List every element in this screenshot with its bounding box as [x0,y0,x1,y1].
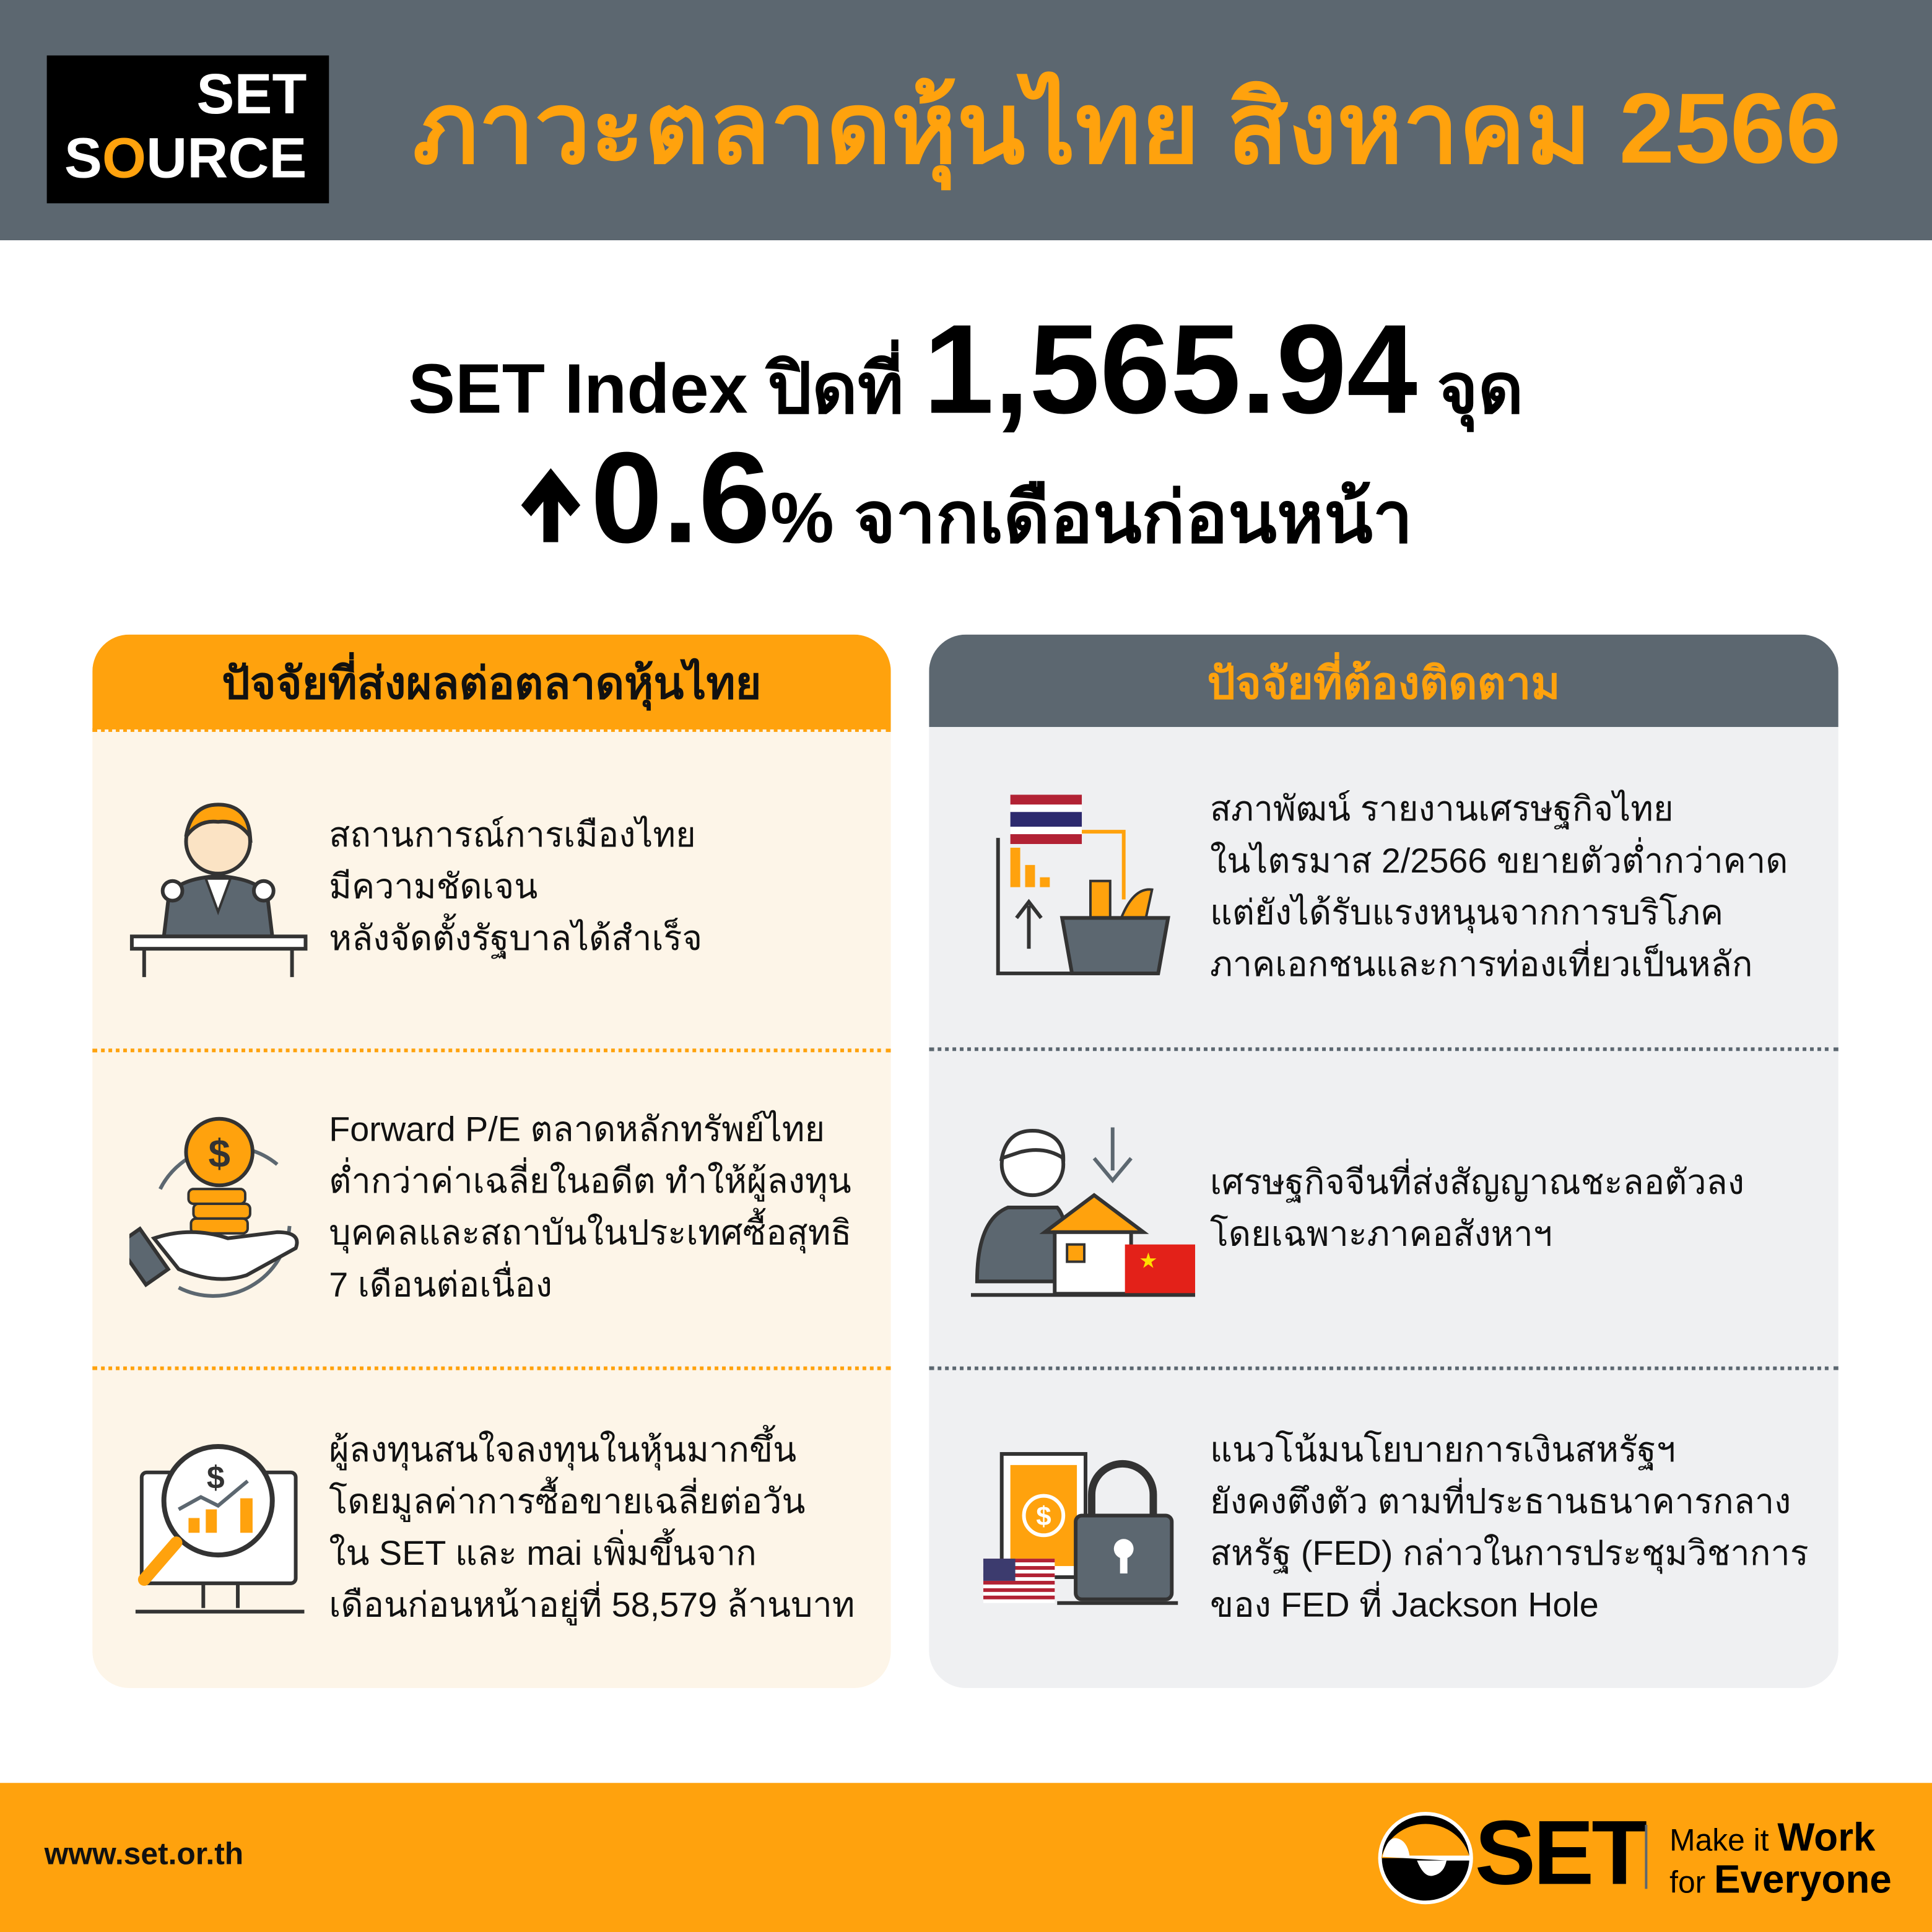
text: politics [329,816,702,959]
SET logo and slogan: SET [1475,1801,1645,1904]
icon: magnifier over monitor: $ [207,1460,225,1495]
icon: up arrow [521,468,581,542]
icon: worried man with house and China flag [971,1127,1195,1297]
text: Thai GDP: ในไตรมาส 2/2566 ขยายตัวต่ำกว่าคาด [1210,842,1788,880]
text: politics: สถานการณ์การเมืองไทย [329,816,696,854]
icon: hand with coin [129,1117,299,1298]
logo: SET SOURCE: SET [196,61,307,126]
text: trading value: เดือนก่อนหน้าอยู่ที่ 58,579 ล้านบาท [329,1586,855,1624]
panel: right factors to watch [929,635,1838,1688]
text: Thai GDP: สภาพัฒน์ รายงานเศรษฐกิจไทย [1210,790,1674,828]
text: Thai GDP: ภาคเอกชนและการท่องเที่ยวเป็นหลัก [1210,945,1753,983]
text: trading value [329,1425,855,1625]
text: forward PE [329,1110,851,1303]
text: forward PE: บุคคลและสถาบันในประเทศซื้อสุทธิ [329,1214,851,1252]
icon: worried man with house and China flag: ★ [1140,1251,1157,1271]
panel: left factors [92,635,891,1688]
text: trading value: โดยมูลค่าการซื้อขายเฉลี่ยต่อวัน [329,1482,805,1520]
text: FED policy: ของ FED ที่ Jackson Hole [1210,1586,1599,1624]
left panel heading [92,635,891,729]
icon: money and padlock with US flag [983,1451,1178,1605]
icon: hand with coin: $ [208,1131,230,1175]
text: trading value: ใน SET และ mai เพิ่มขึ้นจาก [329,1534,757,1572]
text: politics: มีความชัดเจน [329,868,537,906]
website url: www.set.or.th [45,1837,243,1872]
text: FED policy: ยังคงตึงตัว ตามที่ประธานธนาคารกลาง [1210,1482,1791,1520]
SET logo and slogan [1378,1801,1892,1905]
text: forward PE: 7 เดือนต่อเนื่อง [329,1266,552,1303]
right panel heading: ปัจจัยที่ต้องติดตาม [1207,658,1560,708]
text: Thai GDP [1210,790,1788,983]
text: FED policy [1210,1430,1809,1624]
icon: politician at podium [130,803,307,977]
logo: SET SOURCE: SOURCE [64,126,307,189]
text: Thai GDP: แต่ยังได้รับแรงหนุนจากการบริโภค [1210,894,1723,931]
text: FED policy: สหรัฐ (FED) กล่าวในการประชุมวิชาการ [1210,1534,1809,1572]
left panel heading: ปัจจัยที่ส่งผลต่อตลาดหุ้นไทย [222,658,762,708]
logo: SET SOURCE [47,56,329,203]
text: China economy: เศรษฐกิจจีนที่ส่งสัญญาณชะลอตัวลง [1210,1163,1744,1201]
right panel heading [929,635,1838,727]
header bar [0,0,1932,240]
icon: money and padlock with US flag: $ [1036,1501,1051,1531]
icon: Thai economy basket [996,794,1170,975]
SET logo and slogan: for Everyone [1669,1857,1892,1901]
text: China economy [1210,1158,1744,1253]
title: ภาวะตลาดหุ้นไทย สิงหาคม 2566 [413,74,1841,185]
text: forward PE: ต่ำกว่าค่าเฉลี่ยในอดีต ทำให้ผู้ลงทุน [329,1162,851,1200]
SET index headline: SET Index ปิดที่ 1,565.94 จุด [408,298,1524,440]
footer bar [0,1783,1932,1932]
change headline: 0.6% จากเดือนก่อนหน้า [591,426,1413,570]
icon: magnifier over monitor [135,1444,305,1614]
text: forward PE: Forward P/E ตลาดหลักทรัพย์ไทย [329,1110,825,1148]
SET logo and slogan: Make it Work [1669,1815,1875,1860]
text: FED policy: แนวโน้มนโยบายการเงินสหรัฐฯ [1210,1430,1676,1469]
text: trading value: ผู้ลงทุนสนใจลงทุนในหุ้นมากขึ้น [329,1430,796,1469]
text: China economy: โดยเฉพาะภาคอสังหาฯ [1210,1215,1552,1253]
text: politics: หลังจัดตั้งรัฐบาลได้สำเร็จ [329,919,702,957]
